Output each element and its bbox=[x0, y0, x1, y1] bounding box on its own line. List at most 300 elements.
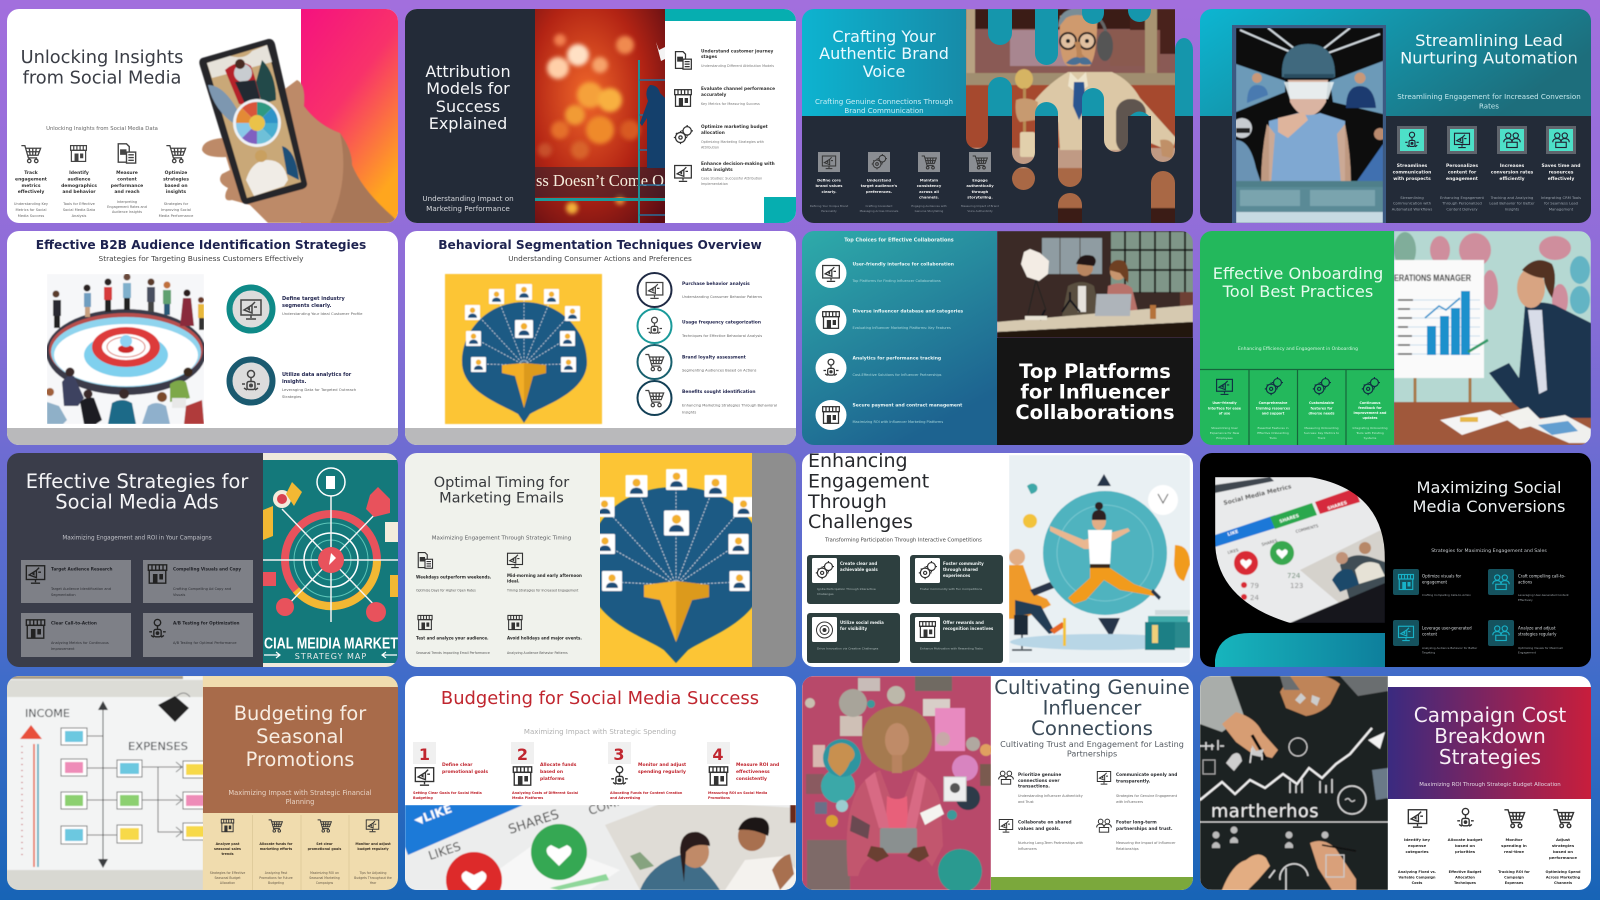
item 1 bbox=[638, 273, 762, 307]
footer band bbox=[405, 428, 796, 445]
title: Models for bbox=[426, 79, 510, 98]
photo: chalkboard with hands bbox=[1200, 676, 1388, 890]
label: Identify bbox=[69, 170, 89, 176]
icon: monitor bbox=[508, 553, 522, 568]
caption: Tips for Adjusting bbox=[359, 871, 386, 875]
heading: based on bbox=[540, 769, 563, 775]
caption: Analysis bbox=[72, 214, 87, 218]
caption: Allocation bbox=[220, 881, 235, 885]
icon: bot bbox=[149, 619, 166, 637]
icon: cart bbox=[645, 390, 664, 407]
label: data insights bbox=[701, 167, 733, 173]
label: authentically bbox=[966, 184, 994, 188]
teal header bbox=[1200, 9, 1591, 116]
column: measure content bbox=[107, 144, 147, 214]
icon: cart bbox=[1504, 810, 1525, 828]
title: Connections bbox=[1031, 717, 1153, 740]
photo frame bbox=[1232, 25, 1386, 223]
panel: B2B Audience Identification bbox=[7, 231, 398, 445]
icon tile bbox=[915, 558, 940, 583]
title: Seasonal bbox=[256, 725, 344, 748]
label: accurately bbox=[701, 92, 727, 98]
cream base bbox=[7, 676, 398, 890]
column: set clear goals bbox=[308, 820, 341, 885]
subtitle: Marketing Performance bbox=[426, 204, 510, 213]
illustration: funnel with audience tiles bbox=[587, 469, 765, 663]
label: Analyze past bbox=[216, 842, 240, 846]
title: Challenges bbox=[808, 511, 913, 533]
heading: connections over bbox=[1018, 778, 1060, 784]
caption: Content Delivery bbox=[1446, 208, 1478, 212]
caption: Enhancing Marketing Strategies Through Behavioral bbox=[682, 404, 777, 408]
list item 1 bbox=[676, 48, 774, 69]
panel: Top Platforms for Influencer Collaborations bbox=[802, 231, 1193, 445]
caption: Optimizing Marketing Strategies with bbox=[701, 140, 764, 144]
icon: target bbox=[816, 622, 832, 638]
label: of use bbox=[1219, 412, 1231, 416]
gradient title band bbox=[1388, 687, 1591, 799]
icon: people bbox=[1504, 133, 1520, 148]
label: diverse needs bbox=[1308, 412, 1335, 416]
item 4 bbox=[638, 381, 777, 415]
heading: User-friendly interface for collaboration bbox=[852, 262, 954, 268]
icon box bbox=[868, 152, 890, 172]
label: consistency bbox=[917, 184, 942, 188]
column dividers bbox=[252, 815, 349, 890]
heading: Define clear bbox=[442, 762, 473, 768]
card background bbox=[143, 560, 253, 603]
subtitle: Understanding Impact on bbox=[422, 194, 514, 203]
heading: Monitor and adjust bbox=[638, 762, 687, 768]
heading: Clear Call-to-Action bbox=[51, 620, 97, 626]
column: track engagement bbox=[14, 146, 49, 218]
caption: Automated Workflows bbox=[1392, 208, 1432, 212]
label: effectively bbox=[18, 189, 44, 195]
column: personalizes content bbox=[1440, 126, 1485, 212]
icon: cart bbox=[1553, 810, 1574, 828]
photo: social media metrics screen bbox=[1215, 477, 1385, 623]
caption: Maximizing ROI with Influencer Marketing Platforms bbox=[852, 420, 943, 424]
caption: Defining Your Unique Brand bbox=[810, 204, 849, 208]
heading: strategies regularly bbox=[1518, 632, 1557, 636]
caption: Seasonal Trends Impacting Email Performance bbox=[416, 651, 490, 655]
label: performance bbox=[111, 183, 143, 189]
number: 4 bbox=[712, 745, 724, 764]
heading: Prioritize genuine bbox=[1018, 772, 1061, 778]
column: allocate budget bbox=[1448, 808, 1483, 885]
caption: Experience for New bbox=[1210, 431, 1240, 435]
title: Unlocking Insights bbox=[21, 47, 183, 68]
illustration: funnel with audience tiles bbox=[445, 274, 602, 424]
icon: monitor bbox=[823, 266, 839, 281]
caption: Effectively bbox=[1518, 598, 1533, 602]
icon: store bbox=[418, 615, 432, 630]
icon: monitor bbox=[675, 166, 691, 181]
icon: hand bbox=[816, 561, 834, 579]
caption: Budgets Throughout the bbox=[354, 876, 392, 880]
caption: Segmentation bbox=[51, 593, 76, 597]
dark panel bbox=[7, 453, 263, 667]
icon: bot bbox=[1457, 808, 1474, 826]
label: effectively bbox=[1548, 176, 1574, 182]
title: for Influencer bbox=[1020, 380, 1170, 404]
caption: Maximizing ROI on bbox=[310, 871, 339, 875]
title: Behavioral Segmentation Techniques Overview bbox=[438, 238, 762, 252]
title: Crafting Your bbox=[832, 27, 936, 46]
panel: Behavioral Segmentation bbox=[405, 231, 796, 445]
panel: Effective Onboarding Tool Best Practices bbox=[1200, 231, 1591, 445]
caption: Essential Features in bbox=[1258, 426, 1289, 430]
photo: manager reviewing chart: ERATIONS MANAGER bbox=[1394, 273, 1471, 283]
caption: Analyzing Fixed vs. bbox=[1398, 870, 1436, 874]
icon: cart bbox=[21, 146, 41, 163]
title: Effective Onboarding bbox=[1213, 264, 1383, 283]
illustration: woman leaping over circle bbox=[1009, 455, 1190, 663]
title: Voice bbox=[863, 62, 905, 81]
number: 2 bbox=[517, 745, 528, 764]
caption: Strategies for bbox=[164, 202, 189, 206]
label: improvement and bbox=[1354, 411, 1387, 415]
caption: Seasonal Budget bbox=[214, 876, 241, 880]
caption: Analyzing Audience Behavior Patterns bbox=[507, 651, 568, 655]
heading: Brand loyalty assessment bbox=[682, 354, 746, 360]
label: content bbox=[117, 176, 138, 182]
label: engagement bbox=[1446, 176, 1479, 182]
column: continuous feedback bbox=[1352, 377, 1388, 440]
subtitle: Understanding Consumer Actions and Preferences bbox=[508, 254, 692, 263]
icon: gear head bbox=[919, 561, 937, 579]
icon: monitor bbox=[999, 820, 1013, 832]
icon: mint tile bbox=[1400, 129, 1424, 151]
title: from Social Media bbox=[23, 68, 181, 88]
photo: social media metrics screen: SHARES bbox=[1279, 513, 1300, 525]
label: training resources bbox=[1256, 406, 1290, 410]
panel: Enhancing Engagement Through Challenges bbox=[802, 450, 1193, 667]
caption: Media Success bbox=[18, 214, 44, 218]
heading: Purchase behavior analysis bbox=[682, 281, 750, 287]
label: categories bbox=[1405, 849, 1429, 854]
photo: manager reviewing chart bbox=[1394, 231, 1591, 445]
caption: Systems bbox=[1364, 436, 1377, 440]
label: Customizable bbox=[1309, 401, 1335, 405]
caption: Integrating Onboarding bbox=[1352, 426, 1388, 430]
caption: Cost-Effective Solutions for Influencer Partnerships bbox=[852, 373, 942, 377]
icon: bot bbox=[611, 766, 628, 784]
label: resources bbox=[1549, 170, 1574, 176]
column: identify audience bbox=[61, 146, 97, 218]
heading: Collaborate on shared bbox=[1018, 820, 1072, 826]
icon: store monitor bbox=[26, 620, 45, 638]
caption: Messaging Across Channels bbox=[860, 209, 899, 213]
pink orange gradient panel bbox=[301, 9, 398, 223]
caption: Expenses bbox=[1505, 881, 1523, 885]
caption: Engagement bbox=[1518, 650, 1537, 654]
caption: Effective Onboarding bbox=[1257, 431, 1289, 435]
subtitle: Strategies for Targeting Business Customers Effectively bbox=[99, 254, 304, 263]
icon: monitor store bbox=[920, 622, 935, 637]
caption: Channels bbox=[1554, 881, 1572, 885]
step 1 bbox=[413, 742, 488, 800]
dark footer bbox=[1200, 116, 1591, 223]
photo: likes and shares: LIKE bbox=[421, 802, 454, 825]
column: analyze past bbox=[210, 819, 245, 885]
label: Identify key bbox=[1404, 837, 1431, 842]
icon tile bbox=[1488, 569, 1514, 595]
step 3 bbox=[608, 742, 687, 800]
caption: Improvement bbox=[51, 647, 75, 651]
list header: Top Choices for Effective Collaborations bbox=[844, 238, 954, 244]
caption: Costs bbox=[1412, 881, 1422, 885]
icon: cart bbox=[645, 354, 664, 371]
photo: social media metrics screen: 724 bbox=[1287, 572, 1301, 580]
icon tile bbox=[1488, 620, 1514, 646]
caption: Targeting bbox=[1421, 650, 1435, 654]
label: strategies bbox=[1552, 843, 1575, 848]
column: increases conversion bbox=[1489, 126, 1535, 212]
photo: social media metrics screen: COMMENTS bbox=[1295, 523, 1319, 534]
heading: Avoid holidays and major events. bbox=[507, 636, 582, 640]
banner arrows bbox=[264, 652, 397, 658]
caption: Understanding Consumer Behavior Patterns bbox=[682, 295, 762, 299]
icon: gears bbox=[1362, 377, 1380, 395]
icon: cart bbox=[922, 156, 936, 169]
caption: Understanding Influencer Authenticity bbox=[1018, 794, 1083, 798]
icon tile bbox=[1497, 126, 1527, 154]
step 4 bbox=[707, 742, 779, 800]
label: based on bbox=[164, 183, 188, 189]
heading: Diverse influencer database and categories bbox=[852, 308, 963, 314]
card background bbox=[910, 555, 1003, 604]
label: feedback for bbox=[1358, 406, 1382, 410]
panel: Campaign Cost Breakdown Strategies bbox=[1200, 676, 1591, 890]
caption: Budgeting bbox=[413, 796, 433, 800]
icon: people bbox=[1097, 819, 1111, 832]
column: monitor spending bbox=[1498, 810, 1530, 885]
label: demographics bbox=[61, 183, 97, 189]
icon: monitor bbox=[26, 566, 45, 583]
heading: transparently. bbox=[1116, 778, 1151, 784]
label: storytelling. bbox=[967, 196, 993, 200]
label: budget regularly bbox=[357, 847, 389, 851]
column: user-friendly bbox=[1208, 379, 1242, 440]
photo: cartoon man at microphone bbox=[960, 8, 1200, 223]
caption: Employees bbox=[1216, 436, 1233, 440]
ring bbox=[638, 345, 672, 379]
caption: Variable Campaign bbox=[1398, 876, 1436, 880]
caption: Streamlining bbox=[1400, 196, 1424, 200]
icon: cart bbox=[318, 820, 331, 832]
label: Optimize marketing budget bbox=[701, 124, 768, 130]
subtitle: Maximizing Engagement Through Strategic Timing bbox=[432, 536, 571, 542]
caption: Top Platforms for Finding Influencer Collaborations bbox=[852, 279, 941, 283]
heading: Foster community bbox=[943, 561, 984, 566]
caption: Measuring ROI on Social Media bbox=[708, 791, 768, 795]
item: visuals bbox=[1393, 569, 1471, 597]
caption: Tools bbox=[1268, 436, 1277, 440]
heading: transactions. bbox=[1018, 784, 1050, 790]
icon: bot bbox=[242, 370, 260, 390]
label: communication bbox=[1393, 170, 1431, 176]
label: with prospects bbox=[1393, 176, 1431, 182]
card: target audience research bbox=[21, 560, 131, 603]
heading: spending regularly bbox=[638, 769, 686, 775]
item: prioritize bbox=[999, 771, 1083, 804]
item: call-to-action bbox=[1488, 569, 1570, 602]
panel: Cultivating Genuine Influencer Connections bbox=[802, 676, 1193, 893]
caption: Integrating CRM Tools bbox=[1541, 196, 1581, 200]
title: Promotions bbox=[246, 748, 354, 771]
title: Effective Strategies for bbox=[26, 470, 248, 493]
label: promotional goals bbox=[308, 847, 341, 851]
panel: Maximizing Social Media Conversions bbox=[1200, 453, 1591, 667]
card background bbox=[21, 613, 131, 657]
icon circle 2 bbox=[230, 360, 272, 402]
title: Nurturing Automation bbox=[1400, 48, 1578, 68]
card background bbox=[807, 555, 900, 604]
subtitle: Crafting Genuine Connections Through bbox=[815, 97, 953, 106]
caption: Audience Insights bbox=[112, 210, 142, 214]
title: Engagement bbox=[808, 470, 929, 492]
caption: Personality bbox=[821, 209, 837, 213]
black background bbox=[1200, 453, 1591, 667]
label: real-time bbox=[1504, 849, 1524, 854]
caption: Understanding Different Attribution Models bbox=[701, 64, 774, 68]
caption: Nurturing Long-Term Partnerships with bbox=[1018, 841, 1083, 845]
heading: Offer rewards and bbox=[943, 620, 984, 625]
subtitle: Partnerships bbox=[1067, 748, 1117, 758]
title: Enhancing bbox=[808, 450, 908, 472]
subtitle: Strategies for Maximizing Engagement and Sales bbox=[1431, 548, 1547, 554]
label: Engage bbox=[972, 178, 988, 182]
label: Optimize bbox=[165, 170, 187, 176]
caption: Across Marketing bbox=[1546, 876, 1581, 880]
heading: insights. bbox=[282, 379, 306, 385]
label: preferences. bbox=[866, 190, 893, 194]
label: Understand customer journey bbox=[701, 48, 774, 54]
heading: Compelling Visuals and Copy bbox=[173, 566, 241, 572]
caption: Case Studies: Successful Attribution bbox=[701, 176, 762, 180]
item: analyze bbox=[1488, 620, 1564, 654]
icon box bbox=[918, 152, 940, 172]
title: Effective B2B Audience Identification Strategies bbox=[36, 238, 366, 252]
icon: notes bbox=[675, 90, 691, 106]
label: Maintain bbox=[920, 178, 938, 182]
heading: Test and analyze your audience. bbox=[416, 636, 489, 640]
label: interface for ease bbox=[1208, 406, 1242, 410]
label: clearly. bbox=[822, 190, 837, 194]
heading: Create clear and bbox=[840, 561, 877, 566]
item: foster bbox=[1097, 819, 1176, 851]
caption: Setting Clear Goals for Social Media bbox=[413, 791, 483, 795]
icon: store bbox=[823, 312, 839, 328]
brown title panel bbox=[203, 687, 398, 813]
label: Track bbox=[24, 170, 39, 176]
caption: Analyzing Past bbox=[265, 871, 288, 875]
heading: experiences bbox=[943, 573, 971, 578]
caption: Visuals bbox=[173, 593, 185, 597]
heading: A/B Testing for Optimization bbox=[173, 620, 240, 626]
caption: Enhance Motivation with Rewarding Tasks bbox=[920, 646, 983, 650]
card background bbox=[21, 560, 131, 603]
icon: monitor bbox=[415, 768, 434, 785]
icon tile bbox=[1393, 569, 1419, 595]
caption: Analyzing Costs of Different Social bbox=[512, 791, 578, 795]
heading: Utilize data analytics for bbox=[282, 372, 352, 378]
label: Define core bbox=[817, 178, 841, 182]
number: 3 bbox=[613, 745, 625, 764]
subtitle: Unlocking Insights from Social Media Data bbox=[46, 126, 158, 132]
heading: Weekdays outperform weekends. bbox=[416, 574, 492, 580]
dark footer bbox=[802, 116, 1193, 223]
caption: Implementation bbox=[701, 182, 728, 186]
heading: Measure ROI and bbox=[736, 762, 779, 768]
icon: people bbox=[1493, 575, 1509, 590]
title: Budgeting for Social Media Success bbox=[441, 688, 759, 709]
caption: Allocation bbox=[1455, 876, 1475, 880]
green panel bbox=[1200, 231, 1394, 445]
label: allocation bbox=[701, 130, 725, 136]
footer band bbox=[7, 428, 398, 445]
icon circle bbox=[816, 305, 846, 335]
heading: Mid-morning and early afternoon bbox=[507, 573, 582, 578]
title: Cultivating Genuine bbox=[994, 676, 1190, 699]
caption: Measuring the Impact of Influencer bbox=[1116, 841, 1176, 845]
number: 1 bbox=[419, 745, 430, 764]
caption: Budgeting bbox=[268, 881, 284, 885]
title: Tool Best Practices bbox=[1222, 282, 1373, 301]
item 2 bbox=[638, 309, 762, 343]
heading: through shared bbox=[943, 567, 978, 572]
label: efficiently bbox=[1499, 176, 1525, 182]
caption: Target Audience Identification and bbox=[50, 587, 111, 591]
caption: Lead Behavior for Better bbox=[1489, 202, 1535, 206]
heading: content bbox=[1422, 632, 1438, 636]
item: test and analyze bbox=[416, 615, 490, 655]
photo: likes and shares bbox=[405, 793, 796, 900]
caption: Track bbox=[1317, 436, 1326, 440]
panel: Effective Strategies for Social Media Ads bbox=[7, 453, 398, 667]
label: performance bbox=[1549, 855, 1577, 860]
heading: Allocate funds bbox=[540, 762, 577, 768]
caption: Optimize Days for Higher Open Rates bbox=[416, 588, 476, 592]
caption: Tracking ROI for bbox=[1498, 870, 1530, 874]
list item 4 bbox=[675, 161, 775, 186]
title: Attribution bbox=[425, 62, 511, 81]
icon tile bbox=[812, 558, 837, 583]
caption: Understanding Your Ideal Customer Profile bbox=[282, 311, 363, 316]
caption: Drive Innovation via Creative Challenges bbox=[817, 646, 879, 650]
item: mid-morning bbox=[506, 553, 582, 592]
label: trends bbox=[221, 852, 234, 856]
title: Marketing Emails bbox=[439, 490, 564, 506]
green footer bar bbox=[991, 877, 1193, 890]
top teal bar bbox=[665, 9, 796, 21]
label: updates bbox=[1362, 416, 1378, 420]
caption: Tracking and Analyzing bbox=[1490, 196, 1533, 200]
heading: engagement bbox=[1422, 580, 1448, 584]
subtitle: Enhancing Efficiency and Engagement in Onboarding bbox=[1238, 346, 1358, 352]
item: collaborate bbox=[999, 820, 1083, 851]
subtitle: Transforming Participation Through Interactive Competitions bbox=[824, 538, 982, 544]
title: Media Conversions bbox=[1413, 497, 1565, 516]
label: spending in bbox=[1501, 843, 1527, 848]
caption: Genuine Storytelling bbox=[915, 209, 944, 213]
caption: Allocating Funds for Content Creation bbox=[610, 791, 683, 795]
heading: achievable goals bbox=[840, 567, 878, 572]
photo: bokeh with ladder bbox=[535, 9, 665, 223]
icon box bbox=[818, 152, 840, 172]
caption: Foster Community with Fun Competitions bbox=[920, 587, 983, 591]
